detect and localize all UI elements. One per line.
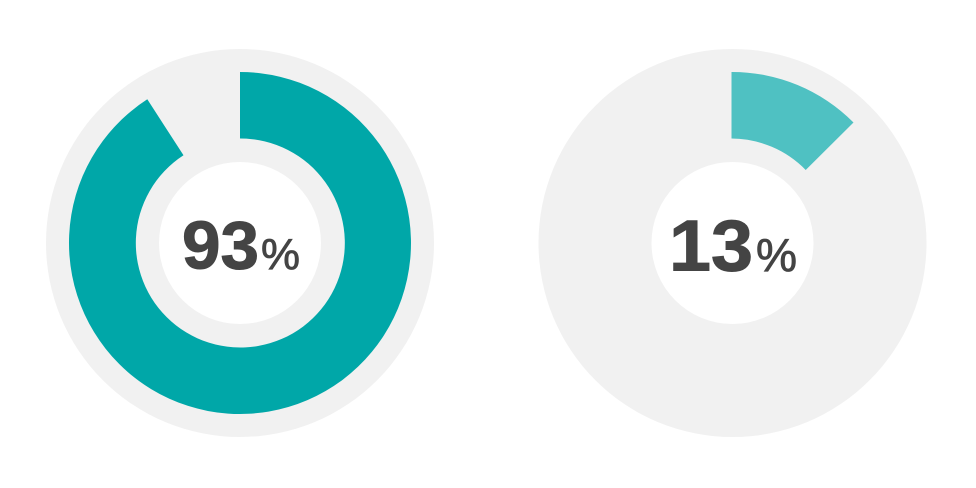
value label: 93%: %	[261, 230, 300, 279]
center circle	[159, 162, 321, 324]
ring segment: 13%	[732, 72, 854, 170]
donut background	[538, 49, 926, 437]
value label: 93%	[182, 208, 300, 284]
donut background	[46, 49, 434, 437]
value label: 13%	[669, 206, 797, 286]
value label: 93%: 93	[182, 208, 259, 284]
value label: 13%: 13	[669, 206, 753, 286]
ring segment: 93%	[69, 72, 411, 414]
donut chart: 13%	[538, 49, 926, 437]
center circle	[652, 162, 814, 324]
donut chart: 93%	[46, 49, 434, 437]
value label: 13%: %	[756, 229, 797, 281]
